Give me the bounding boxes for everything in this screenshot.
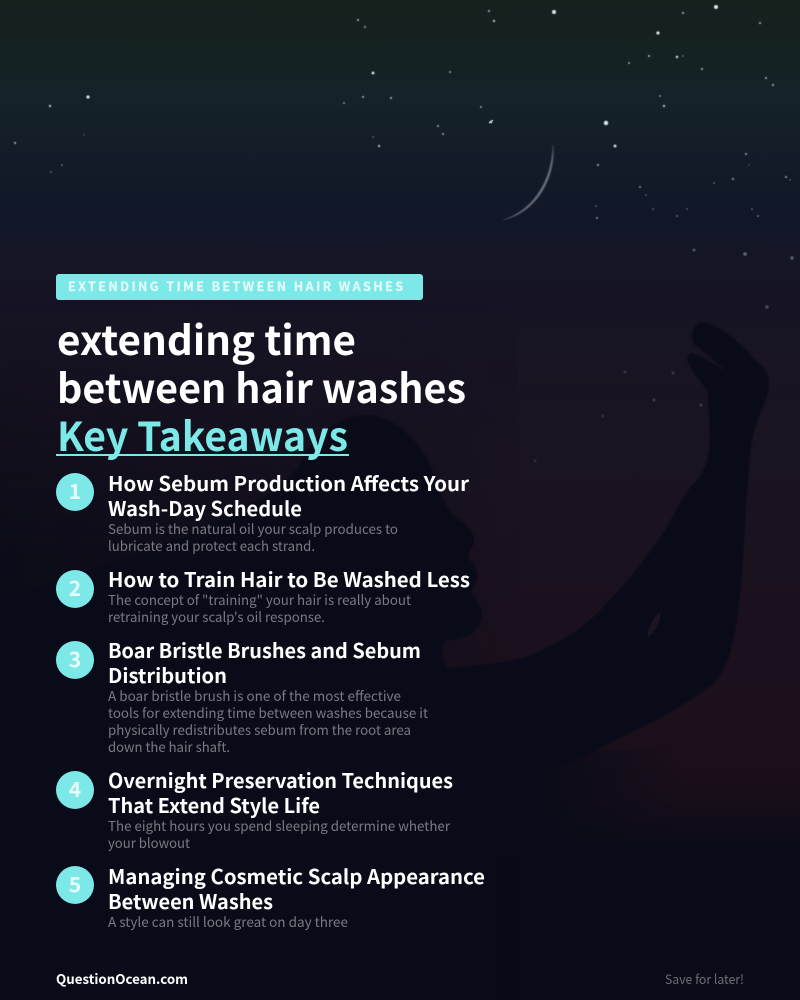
badge 5 (56, 866, 94, 904)
crescent moon (503, 145, 553, 220)
heading 4: Overnight Preservation Techniques (108, 765, 453, 794)
heading 4 (108, 765, 453, 819)
badge 1 (56, 473, 94, 511)
takeaway 4 (56, 765, 453, 852)
heading 5 (108, 861, 485, 915)
takeaway 3 (56, 635, 428, 756)
footer brand: QuestionOcean.com (56, 968, 188, 988)
takeaway 2 (56, 564, 470, 626)
heading 5: Between Washes (108, 886, 273, 915)
heading 3 (108, 635, 421, 689)
body 2: The concept of "training" your hair is really about (108, 589, 411, 609)
takeaway 1 (56, 468, 469, 555)
stars (14, 5, 794, 462)
badge 4: 4 (69, 774, 81, 804)
badge 3 (56, 641, 94, 679)
body 3: physically redistributes sebum from the root area (108, 719, 411, 739)
heading 2: How to Train Hair to Be Washed Less (108, 564, 470, 593)
body 4 (108, 815, 451, 852)
heading 3: Distribution (108, 660, 227, 689)
gap under arm (648, 612, 661, 637)
badge 5: 5 (69, 869, 81, 899)
heading 5: Managing Cosmetic Scalp Appearance (108, 861, 485, 890)
badge 4 (56, 771, 94, 809)
body 3: down the hair shaft. (108, 736, 230, 756)
badge 2: 2 (69, 573, 81, 603)
takeaway 5 (56, 861, 485, 931)
heading 3: Boar Bristle Brushes and Sebum (108, 635, 421, 664)
title (56, 309, 466, 463)
badge 2 (56, 570, 94, 608)
footer save note: Save for later! (665, 969, 744, 988)
body 3: tools for extending time between washes because it (108, 702, 428, 722)
badge 3: 3 (69, 644, 81, 674)
title: extending time (57, 309, 356, 367)
body 2 (108, 589, 411, 626)
heading 1 (108, 468, 469, 522)
badge 1: 1 (69, 476, 81, 506)
body 3 (108, 685, 428, 756)
body 4: The eight hours you spend sleeping determine whether (108, 815, 451, 835)
body 3: A boar bristle brush is one of the most effective (108, 685, 401, 705)
category pill: EXTENDING TIME BETWEEN HAIR WASHES (68, 276, 403, 295)
title: between hair washes (57, 357, 466, 415)
body 4: your blowout (108, 832, 190, 852)
heading 4: That Extend Style Life (108, 790, 320, 819)
heading 1: Wash-Day Schedule (108, 493, 302, 522)
heading 1: How Sebum Production Affects Your (108, 468, 469, 497)
small comet (489, 120, 493, 123)
category pill (56, 274, 423, 300)
body 1: Sebum is the natural oil your scalp produces to (108, 518, 398, 538)
title: Key Takeaways (57, 405, 348, 463)
silhouette of person reaching upward (0, 322, 769, 1000)
body 1: lubricate and protect each strand. (108, 535, 315, 555)
body 2: retraining your scalp's oil response. (108, 606, 325, 626)
body 1 (108, 518, 398, 555)
body 5: A style can still look great on day three (108, 911, 348, 931)
